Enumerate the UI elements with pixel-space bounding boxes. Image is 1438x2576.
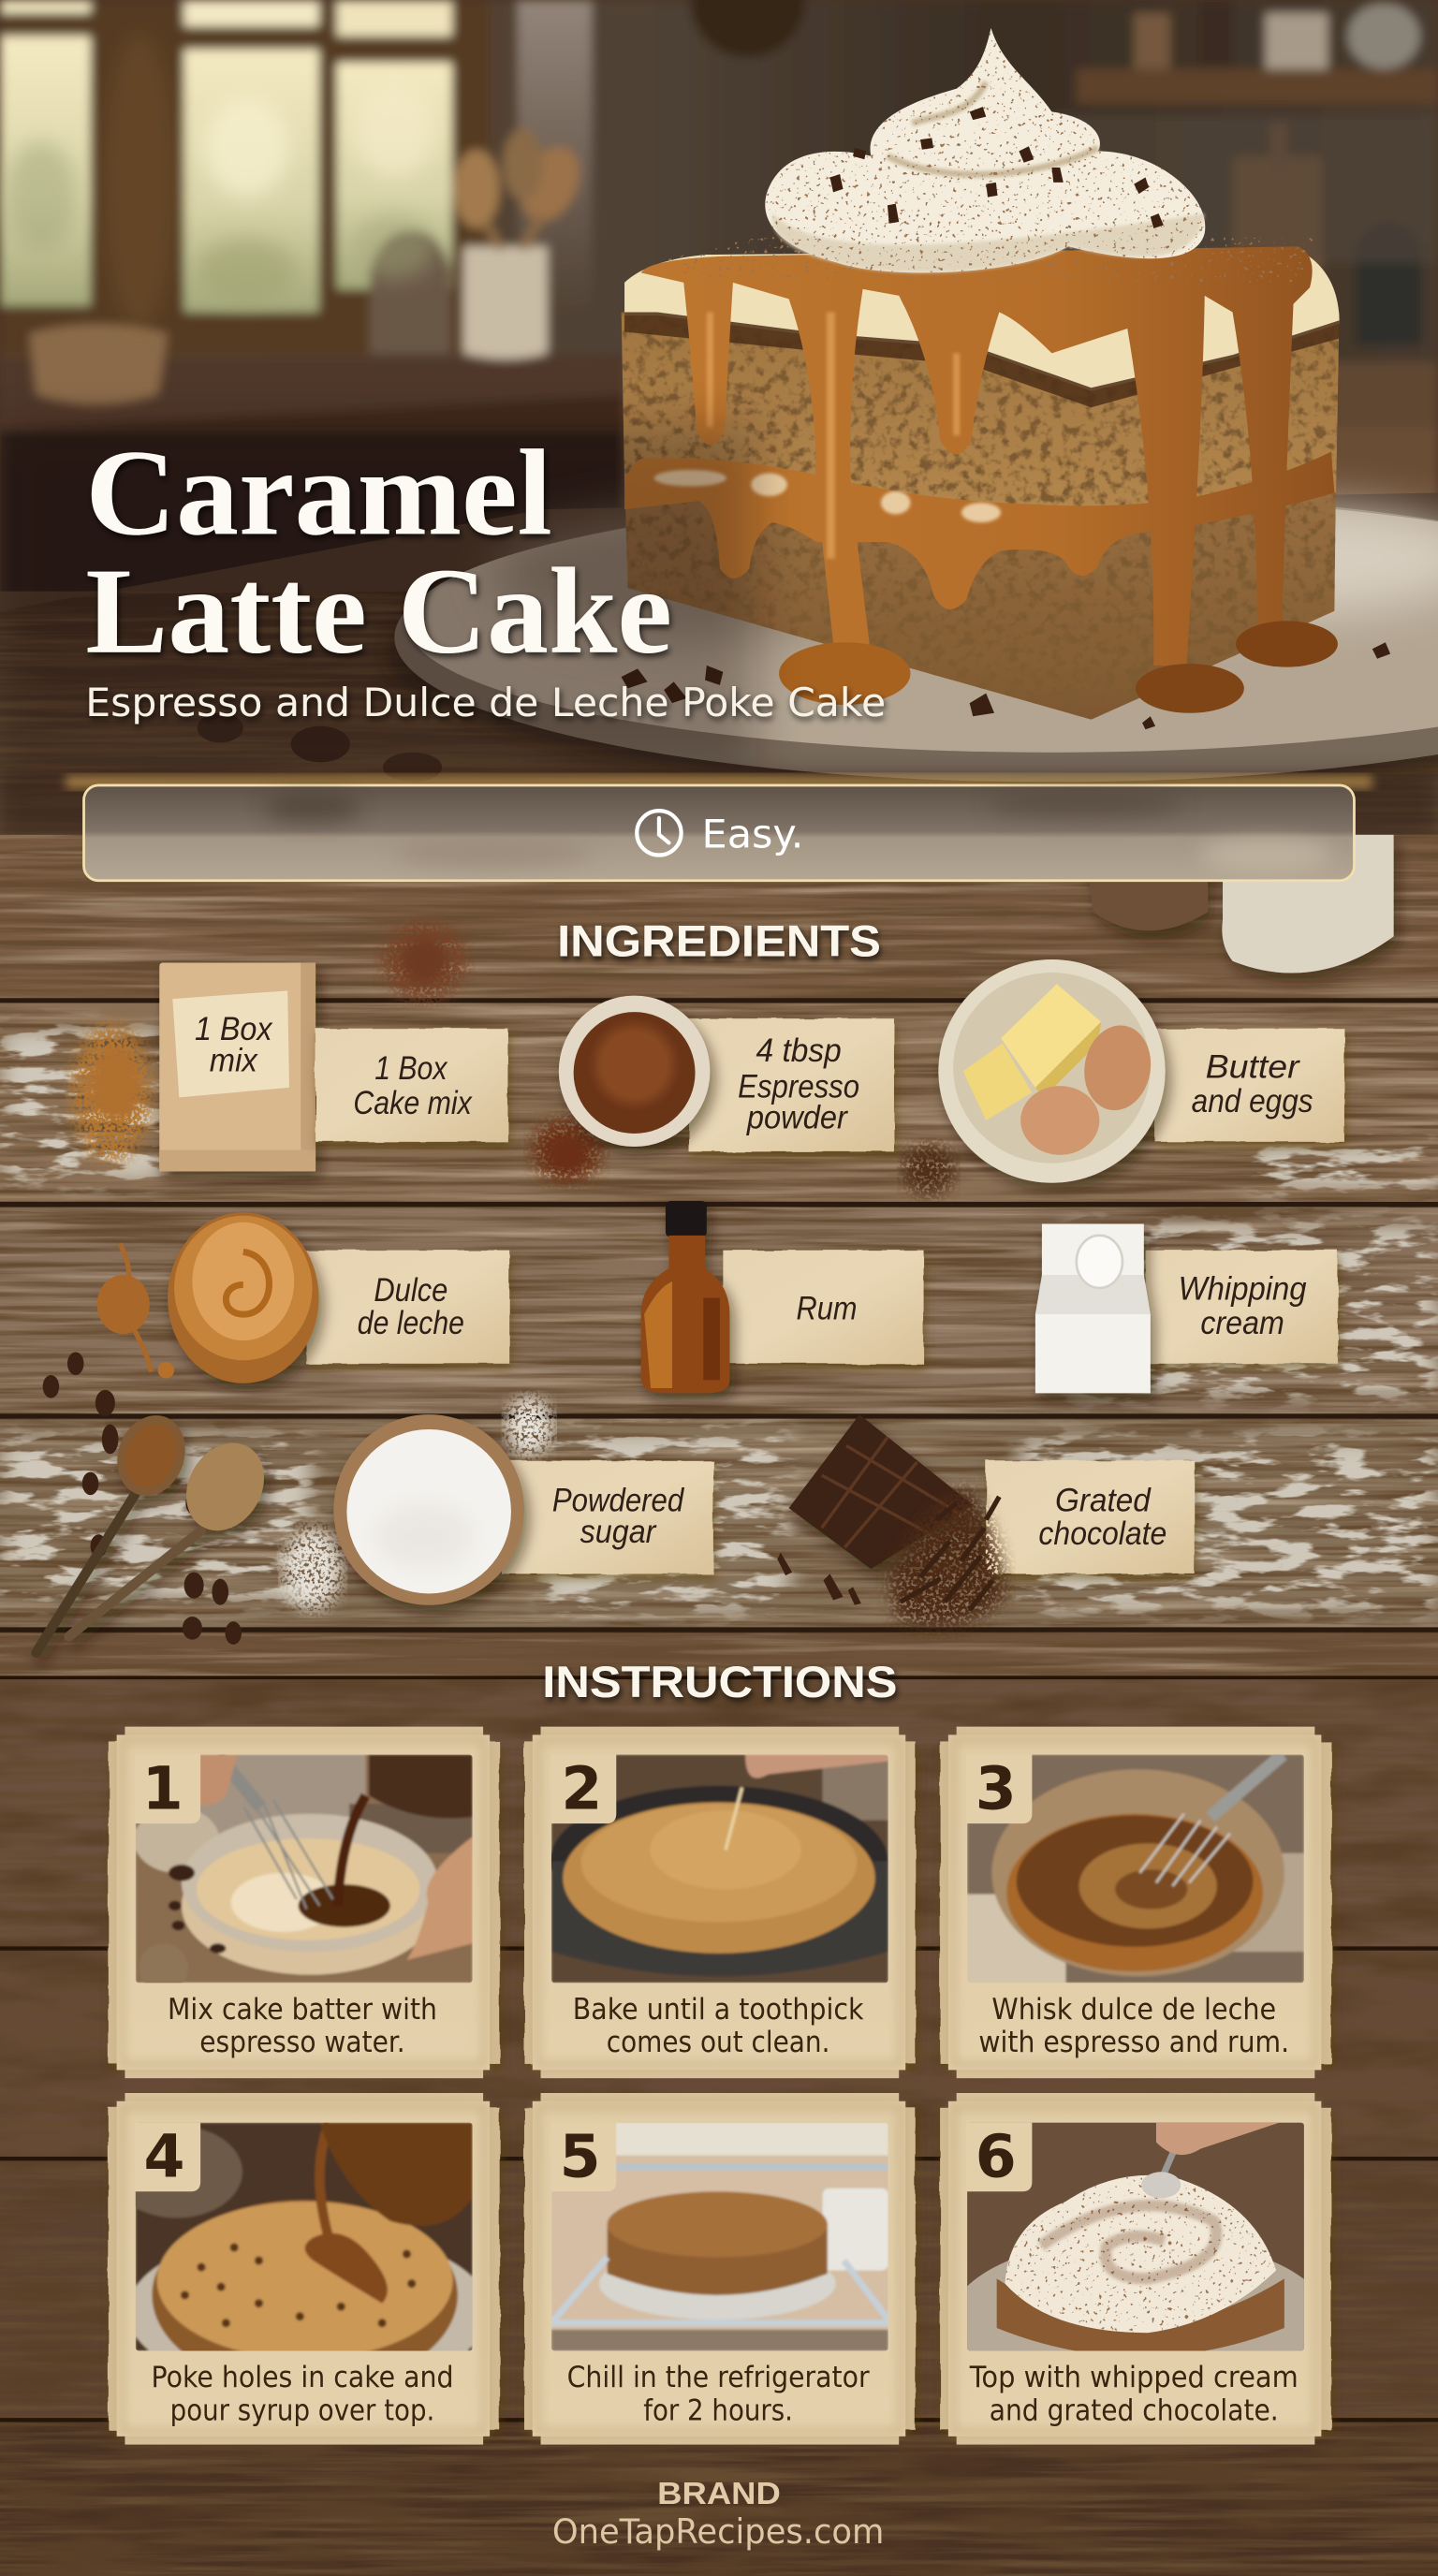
step text [151,2361,453,2427]
title line two: Latte Cake [85,544,672,680]
step card 6 [940,2093,1331,2445]
label paper [689,1018,894,1151]
icon: cake mix box [159,962,315,1171]
whipped cream swirl [765,28,1205,272]
panel: instructions wood background [0,1676,1438,2576]
lower cake layer [624,468,1336,720]
label paper [315,1029,507,1142]
chocolate shavings on top [666,233,1314,283]
icon: clock [637,811,682,856]
step number: 2 [561,1753,602,1822]
label text: 4 tbsp [756,1032,842,1069]
step text: for 2 hours. [643,2393,793,2427]
bottom hero glow [0,772,1438,838]
step card 1 [109,1727,500,2078]
plate crumbs [622,642,1390,729]
coffee beans and spoons [37,1352,280,1653]
step number: 5 [560,2122,601,2191]
step number: 4 [144,2122,185,2191]
icon: plate with butter and eggs [938,959,1166,1183]
plate [387,493,1438,788]
icon: caramel drip [97,1244,174,1379]
cream frosting band [624,250,1340,391]
difficulty banner [66,775,1372,881]
step 1 photo [134,1754,473,1993]
step 3 photo [967,1754,1304,1983]
step 5 photo [551,2123,888,2351]
step text [168,1993,437,2059]
step text: Mix cake batter with [168,1993,437,2027]
label text: Butter [1206,1048,1300,1085]
subtitle: Espresso and Dulce de Leche Poke Cake [85,680,886,725]
step text: Top with whipped cream [969,2361,1299,2394]
label text [1179,1270,1307,1341]
caramel highlights [654,470,1001,522]
step text [978,1993,1289,2059]
step text [567,2361,870,2427]
background jar and milk bottle [1085,835,1394,973]
footer brand: BRAND [657,2477,781,2511]
step text: Bake until a toothpick [573,1993,864,2027]
caramel top and drips [641,246,1313,666]
caramel middle band [624,452,1334,609]
hero table [0,592,1438,838]
cocoa and spice scatter [72,922,955,1610]
label text: sugar [580,1514,657,1550]
ingredient: espresso powder [559,996,894,1151]
ingredient: grated chocolate [777,1414,1195,1628]
step text: with espresso and rum. [978,2026,1289,2059]
ingredient: dulce de leche [97,1212,509,1383]
label text: Dulce [374,1272,448,1309]
title: Caramel [85,425,552,561]
label text [1192,1048,1313,1120]
label text [552,1483,685,1550]
icon: spoons [37,1406,280,1653]
label line one: 1 Box [374,1050,448,1087]
number tab [550,1754,616,1823]
heading: instructions: INSTRUCTIONS [542,1658,897,1707]
step text [969,2361,1299,2427]
step text: Chill in the refrigerator [567,2361,870,2394]
window bokeh and sunlight [5,33,435,329]
label text: Espresso [738,1068,859,1105]
step card 3 [940,1727,1331,2078]
label text [358,1272,464,1341]
box note [172,990,289,1097]
ingredient: whipping cream [1035,1224,1338,1393]
step text: Poke holes in cake and [151,2361,453,2394]
label text: Powdered [552,1483,685,1519]
hero kitchen background [0,0,1438,611]
icon: chocolate shavings [777,1486,1004,1628]
label line two: Cake mix [353,1085,473,1121]
step card 5 [524,2093,916,2445]
panel: hero [0,0,1438,838]
number tab [966,1754,1032,1823]
label text: Grated [1055,1483,1152,1519]
step number: 3 [976,1753,1017,1822]
label text: Rum [797,1290,857,1326]
footer brand [552,2477,884,2552]
label text: Whipping [1179,1270,1307,1307]
step 2 photo [550,1754,888,1983]
panel: ingredients wood background [0,835,1438,1682]
step text: and grated chocolate. [990,2393,1279,2427]
step text: espresso water. [199,2026,405,2059]
step number: 1 [142,1753,183,1822]
label text: cream [1200,1305,1284,1341]
box note text: 1 Box [195,1011,273,1047]
cake slice [622,28,1390,729]
box note text second line: mix [210,1042,258,1078]
shade behind title [0,427,756,772]
coffee beans on table [198,713,442,782]
label paper [1146,1251,1338,1364]
number tab [135,2123,200,2191]
icon: chocolate bar [789,1414,973,1569]
icon: dulce de leche jar [168,1212,319,1383]
ingredient: cake mix [159,962,507,1171]
label paper [986,1460,1195,1573]
upper cake layer [622,313,1340,505]
difficulty text: Easy. [702,812,803,857]
label paper [723,1251,924,1364]
footer website: OneTapRecipes.com [552,2511,884,2552]
ingredient: powdered sugar [333,1414,713,1605]
number tab [550,2123,616,2191]
label text [1038,1483,1167,1552]
label text: de leche [358,1305,464,1341]
icon: rum bottle [641,1201,729,1393]
label paper [501,1460,713,1573]
step card 4 [109,2093,500,2445]
icon: espresso bowl [559,996,710,1147]
label paper [306,1251,509,1364]
ingredient: butter and eggs [938,959,1344,1183]
label text: and eggs [1192,1083,1313,1120]
step 4 photo [110,2123,489,2393]
icon: sugar bowl [333,1414,524,1605]
label paper [1155,1029,1344,1142]
label text [738,1032,859,1136]
step text [573,1993,864,2059]
number tab [966,2123,1032,2191]
step card 2 [524,1727,916,2078]
number tab [135,1754,200,1823]
label text: chocolate [1038,1515,1167,1552]
icon: coffee beans [43,1352,242,1645]
step 6 photo [951,2123,1328,2402]
icon: cream carton [1035,1224,1151,1393]
caramel pools [779,621,1338,713]
ingredient: rum [641,1201,924,1393]
label text: powder [746,1100,848,1136]
heading: ingredients: INGREDIENTS [557,916,881,966]
step text: pour syrup over top. [170,2393,434,2427]
step text: comes out clean. [607,2026,829,2059]
step text: Whisk dulce de leche [991,1993,1276,2027]
step number: 6 [976,2122,1017,2191]
